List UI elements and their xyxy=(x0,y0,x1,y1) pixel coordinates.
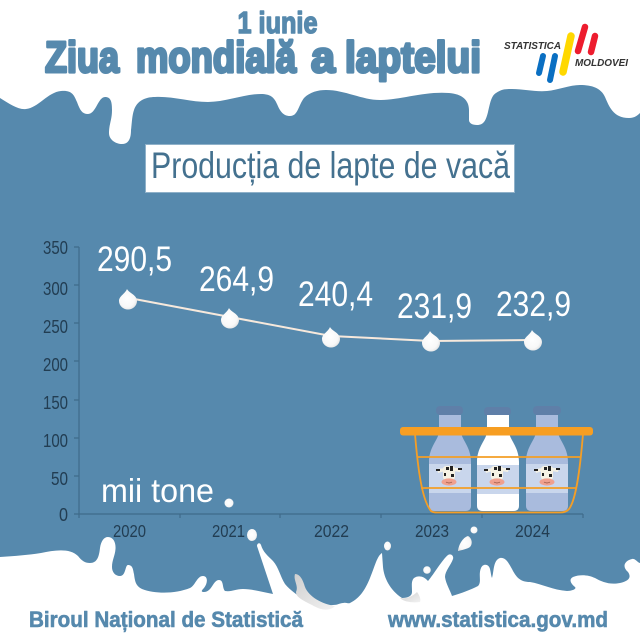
y axis labels: 250 xyxy=(43,317,68,337)
title: date: 1 iunie xyxy=(238,5,318,40)
title: main heading: a xyxy=(311,33,336,82)
title: main heading: Ziua xyxy=(45,33,119,82)
x axis labels: 2023 xyxy=(415,521,449,541)
basket xyxy=(400,427,593,512)
chart heading box: Producția de lapte de vacă xyxy=(151,145,510,186)
logo: Statistica Moldovei: MOLDOVEI xyxy=(575,58,628,69)
data labels: 231,9 xyxy=(397,287,472,326)
y axis labels: 300 xyxy=(43,279,68,299)
x axis labels: 2020 xyxy=(113,521,146,541)
data labels: 290,5 xyxy=(97,240,172,279)
logo: Statistica Moldovei xyxy=(504,27,628,80)
bottle 1 xyxy=(429,406,471,511)
unit label: mii tone xyxy=(101,472,214,509)
footer: organisation: Biroul Național de Statistică xyxy=(29,607,304,632)
x axis labels: 2021 xyxy=(212,521,245,541)
y axis labels: 200 xyxy=(43,355,68,375)
data markers xyxy=(119,289,542,352)
data labels xyxy=(97,240,571,326)
bottle 3 xyxy=(526,406,568,511)
x axis labels xyxy=(113,521,550,541)
footer: website: www.statistica.gov.md xyxy=(387,607,608,632)
bottom milk splash xyxy=(0,537,640,640)
x axis labels: 2024 xyxy=(515,521,550,541)
data labels: 264,9 xyxy=(199,260,274,299)
y axis labels: 50 xyxy=(51,469,68,489)
bottle 2 xyxy=(477,407,519,511)
decorative drop near unit xyxy=(224,498,234,508)
data line xyxy=(129,298,533,341)
data labels: 240,4 xyxy=(298,275,373,314)
y axis labels: 350 xyxy=(43,238,68,258)
line chart xyxy=(43,238,583,541)
y axis labels: 100 xyxy=(43,431,68,451)
x axis labels: 2022 xyxy=(314,521,349,541)
data labels: 232,9 xyxy=(496,285,571,324)
title: main heading: mondială xyxy=(136,33,296,82)
milk splash shading xyxy=(295,574,335,610)
y axis labels: 0 xyxy=(59,505,68,525)
chart axes xyxy=(74,247,583,518)
logo: Statistica Moldovei: STATISTICA xyxy=(504,41,561,52)
y axis labels xyxy=(43,238,68,525)
y axis labels: 150 xyxy=(43,393,68,413)
title: main heading: laptelui xyxy=(345,33,481,82)
icon: milk bottles in basket xyxy=(400,406,593,512)
milk splash droplets xyxy=(247,526,478,574)
